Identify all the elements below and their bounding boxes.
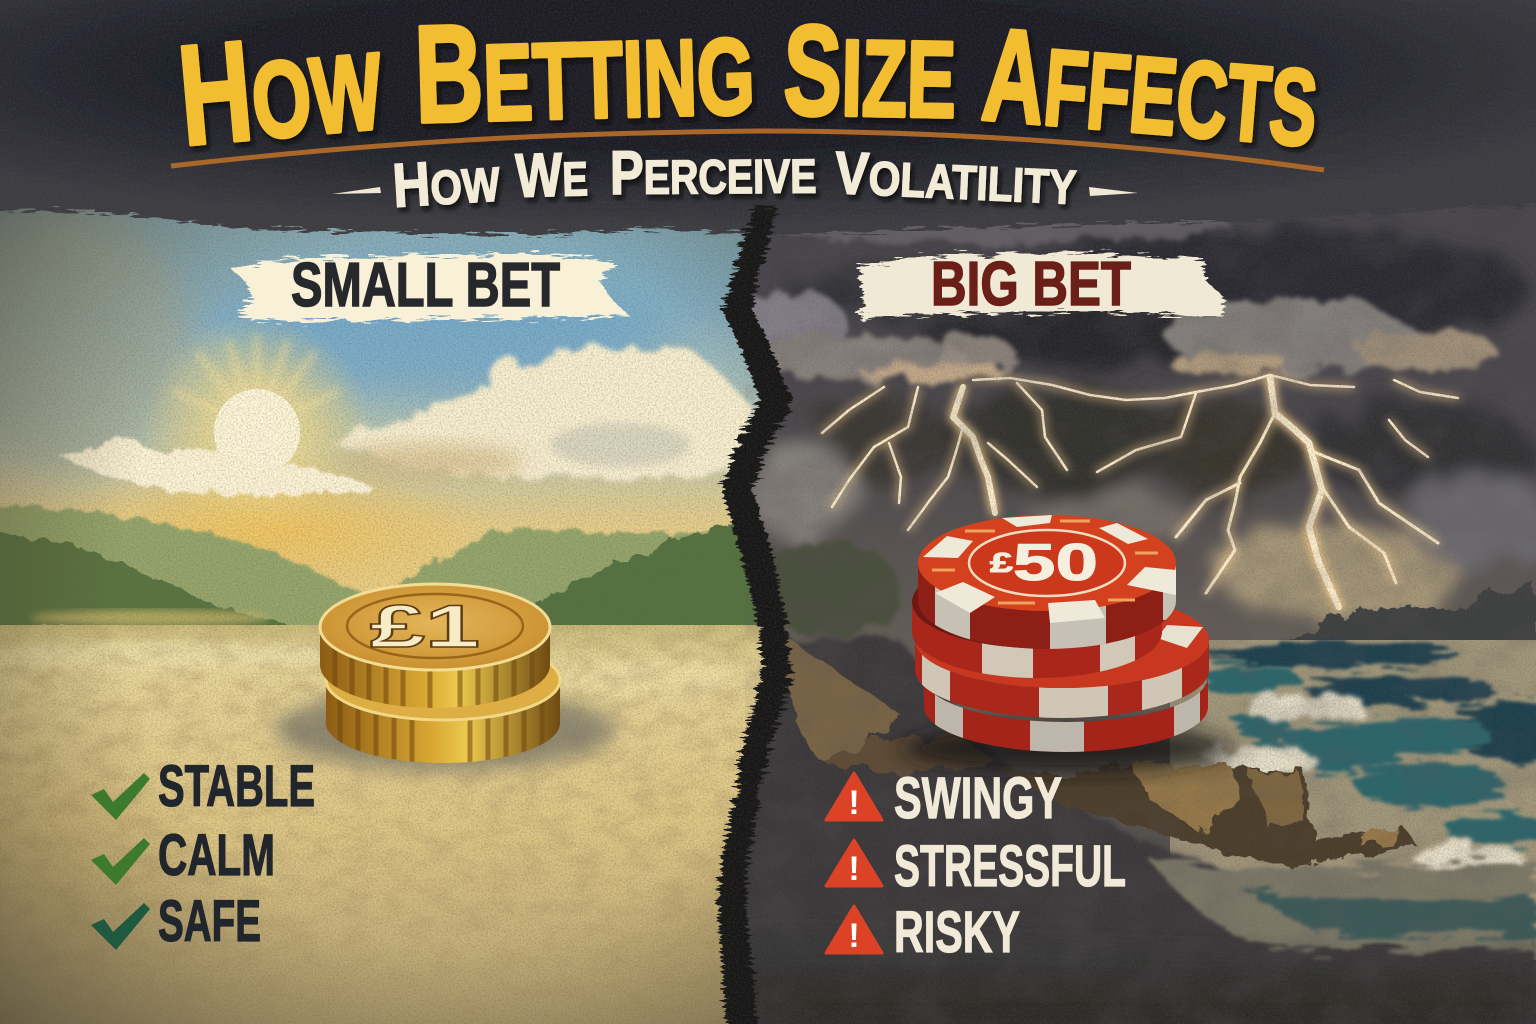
upper coin: [320, 584, 550, 720]
chip 4: [924, 650, 1208, 760]
item: risky: [826, 900, 1020, 965]
chip shadow: [901, 724, 1231, 772]
chip 1 with value: [918, 515, 1177, 660]
item: risky: RISKY: [894, 900, 1020, 965]
sky: [0, 206, 762, 593]
item: calm: CALM: [158, 823, 275, 888]
item: stressful: !: [848, 850, 860, 888]
title: SIZE: [783, 0, 957, 145]
brush banner: [858, 252, 1225, 318]
chip 3: [915, 592, 1209, 730]
subtitle left dash: [332, 187, 381, 194]
item: safe: SAFE: [158, 889, 261, 954]
subtitle text: HOW: [391, 145, 502, 221]
label: big bet: [858, 250, 1225, 319]
texture: blotchy wash: [745, 0, 1536, 1024]
label: small bet: SMALL BET: [291, 251, 560, 320]
label: big bet: BIG BET: [931, 250, 1131, 319]
panel: small bet calm landscape: [0, 190, 790, 1024]
item: stressful: [826, 834, 1126, 899]
storm clouds: [735, 207, 1536, 638]
distant hills: [1290, 581, 1536, 640]
list: big bet traits: [826, 766, 1126, 965]
subtitle text: PERCEIVE: [610, 138, 817, 208]
item: stable: STABLE: [158, 754, 315, 819]
clouds: [60, 345, 750, 495]
subtitle: [332, 138, 1138, 221]
dark header band: [0, 0, 1536, 235]
brush banner: [230, 253, 630, 322]
title: BETTING: [413, 0, 756, 152]
illustration: red poker chips: [901, 515, 1231, 772]
item: swingy: !: [848, 784, 860, 822]
illustration: gold coins: [275, 584, 615, 770]
panel: big bet storm scene: [720, 190, 1536, 1024]
sand beach: [0, 190, 790, 1024]
foreground shore: [730, 640, 1536, 1024]
sun: [154, 322, 360, 499]
title underline: [171, 131, 1324, 170]
subtitle right dash: [1089, 187, 1138, 196]
item: calm: [91, 823, 275, 888]
chip value: 50: [1013, 534, 1098, 592]
item: risky: !: [848, 917, 860, 955]
title: [173, 0, 1323, 175]
item: swingy: SWINGY: [894, 766, 1062, 831]
list: small bet traits: [91, 754, 315, 954]
coin shadow: [275, 690, 615, 770]
subtitle text: [391, 138, 1078, 221]
title: AFFECTS: [978, 0, 1323, 174]
crack divider: [718, 205, 792, 1024]
title: HOW: [173, 0, 388, 175]
item: stressful: STRESSFUL: [894, 834, 1126, 899]
lower coin: [324, 662, 562, 763]
subtitle text: WE: [515, 139, 589, 210]
chip value: £: [990, 547, 1014, 578]
storm sky: [720, 190, 1536, 1024]
subtitle text: VOLATILITY: [833, 139, 1078, 217]
green hills: [0, 503, 758, 625]
rocks: [780, 633, 1418, 867]
lightning bolts: [822, 375, 1458, 607]
item: safe: [91, 889, 261, 954]
stormy sea: [1170, 640, 1536, 960]
item: stable: [91, 754, 315, 820]
coin value: £1: [370, 593, 480, 660]
chip 2: [912, 556, 1162, 690]
item: swingy: [826, 766, 1062, 831]
